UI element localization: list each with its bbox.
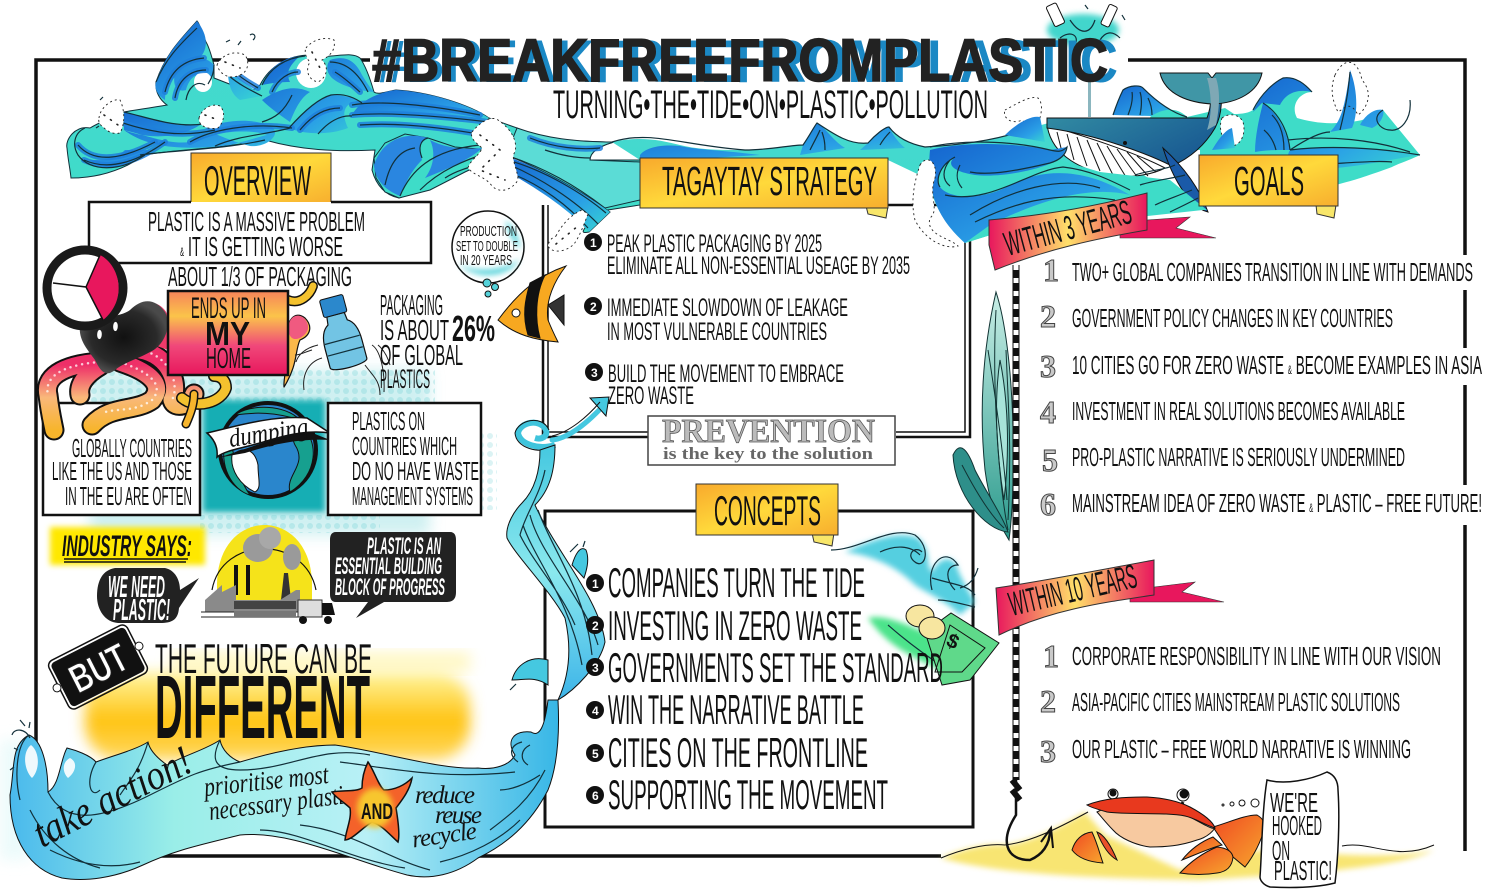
text: ESSENTIAL BUILDING [335,553,442,580]
cascade [505,156,610,232]
list: ten year goals [1040,638,1441,769]
top wave: left section [67,21,640,233]
plaque: prevention [648,413,895,465]
text: DIFFERENT [155,658,370,758]
icon: plastic bottle [313,292,368,372]
thought dots [1222,799,1259,807]
text: packaging is about 26% [380,290,495,394]
plaque: prevention: is the key to the solution [663,444,874,463]
thought bubble: production doubling: PRODUCTION [460,223,517,240]
heading: tagaytay strategy [640,158,888,218]
foam patches [99,38,588,251]
title: #BREAKFREEFROMPLASTIC [372,27,1108,94]
top wave: right section [1200,62,1420,200]
list: strategy items [584,230,910,410]
text: packaging is about 26%: PLASTICS [380,364,430,394]
speech bubble: we need plastic: PLASTIC! [113,592,170,627]
list: three year goals [1040,252,1482,522]
icon: tropical fish [498,266,566,342]
text: reduce reuse recycle [410,782,482,853]
heading: goals: GOALS [1234,158,1304,204]
ribbon: within 10 years [996,558,1224,635]
list: three year goals: 5 [1042,442,1058,478]
speech bubble: essential building block [330,532,456,618]
spray droplets [96,34,255,128]
list: strategy items: IN MOST VULNERABLE COUNTRIES [607,318,827,346]
list: strategy items: BUILD THE MOVEMENT TO EMBRACE [608,360,844,388]
halftone background behind globe [90,370,497,535]
list: concept items: 5 [592,747,599,761]
list: three year goals: 3 [1040,348,1056,384]
text: DO NO HAVE WASTE [352,456,479,486]
thought bubble: production doubling [452,211,524,297]
crest one [155,21,262,100]
big blue wave in front of whale [913,97,1244,247]
list: strategy items: 1 [590,236,597,250]
text: packaging is about 26%: 26% [452,308,495,349]
text: packaging is about 26%: IS ABOUT [380,315,449,347]
text: reduce reuse recycle: reuse [435,802,482,829]
speech bubble: essential building block: PLASTIC IS AN [367,533,441,560]
list: strategy items: 3 [591,366,598,380]
eye of crest two [296,58,326,88]
title: #BREAKFREEFROMPLASTIC [377,28,1118,95]
text: take action: take action! [26,738,200,857]
list: strategy items: PEAK PLASTIC PACKAGING BY 2025 [607,230,822,258]
box: ends up in my home: HOME [206,343,251,375]
icon: starfish: AND [361,799,393,824]
list: strategy items: 2 [590,300,597,314]
heading: industry says: INDUSTRY SAYS: [62,530,192,563]
list: concept items: COMPANIES TURN THE TIDE [608,559,865,606]
wave stripes [78,58,600,165]
speech bubble: hooked on plastic: PLASTIC! [1274,855,1332,886]
box: ends up in my home: ENDS UP IN [191,292,266,325]
list: strategy items: ELIMINATE ALL NON-ESSENTIAL USEAGE BY 2035 [607,252,910,280]
left curl and band [90,112,275,167]
plaque: prevention: PREVENTION [662,413,875,450]
speech bubble: hooked on plastic [1260,772,1339,888]
heading: tagaytay strategy: TAGAYTAY STRATEGY [662,158,877,204]
heading: concepts: CONCEPTS [714,487,821,534]
ribbon: within 3 years [989,193,1216,270]
heading: overview: OVERVIEW [204,157,311,204]
text: THE FUTURE CAN BE [155,635,372,682]
list: concept items [586,559,943,818]
wave crests behind whale [1113,86,1240,150]
thought bubble: production doubling: IN 20 YEARS [460,252,512,269]
list: concept items: 1 [592,577,599,591]
list: three year goals: 1 [1043,252,1059,288]
speech bubble: hooked on plastic: ON [1272,835,1290,866]
sand [941,812,1434,880]
heading: industry says [50,527,205,565]
text: GLOBALLY COUNTRIES [72,433,192,463]
list: ten year goals: 1 [1043,638,1059,674]
octopus [47,286,313,430]
panel: concepts box [545,511,973,827]
panel: tagaytay strategy box [543,205,970,437]
icon: factory [201,525,335,624]
wave: bottom take action [0,700,559,879]
text: LIKE THE US AND THOSE [52,456,192,486]
seaweed [953,292,1013,540]
top wave: middle section [612,120,1203,243]
list: three year goals: 4 [1040,394,1056,430]
speech bubble: we need plastic: WE NEED [108,569,165,604]
speech bubble: we need plastic [97,568,199,627]
plaque: but [41,620,155,714]
rope with hook [1007,265,1053,860]
text: prioritise [201,759,355,826]
crest two [262,56,374,133]
eye of crest one [194,72,212,92]
teal tip area [506,128,640,208]
box: ends up in my home [168,291,288,375]
text: reduce reuse recycle: recycle [410,818,479,853]
thought bubble: production doubling: SET TO DOUBLE [456,238,518,255]
panel: overview statement: & IT IS GETTING WORSE [180,231,343,262]
list: strategy items: ZERO WASTE [608,382,694,410]
panel: plastics on countries [328,403,481,515]
wave line work [75,28,606,228]
text: BLOCK OF PROGRESS [335,574,445,601]
text: GOVERNMENTS SET THE STANDARD [608,644,943,691]
panel: plastics on countries: PLASTICS ON [352,406,425,436]
ribbon: within 10 years: WITHIN 10 YEARS [1005,558,1140,624]
panel: overview statement [89,202,431,263]
base water band [67,21,640,233]
small wave and money: $ [943,630,962,654]
heading: overview [191,153,331,214]
list: strategy items: IMMEDIATE SLOWDOWN OF LEAKAGE [607,294,848,322]
list: three year goals: 6 [1040,486,1056,522]
text: packaging is about 26%: PACKAGING [380,290,443,322]
list: concept items: CITIES ON THE FRONTLINE [608,729,868,776]
box: ends up in my home: MY [205,315,250,352]
speech bubble: hooked on plastic: WE'RE [1270,787,1318,818]
speech bubble: hooked on plastic: HOOKED [1272,810,1322,841]
whale [1047,73,1262,212]
list: concept items: 6 [592,789,599,803]
text: prioritise: necessary plastic [207,779,355,826]
text: MANAGEMENT SYSTEMS [352,481,473,511]
list: three year goals: 2 [1040,298,1056,334]
central water band blue [352,90,489,122]
text: about one third of packaging: ABOUT 1/3 OF PACKAGING [168,261,352,292]
text: IN THE EU ARE OFTEN [65,481,192,511]
text: packaging is about 26%: OF GLOBAL [380,340,463,372]
heading: goals [1199,155,1338,218]
list: concept items: INVESTING IN ZERO WASTE [608,602,862,649]
pie chart: one third [47,250,123,326]
list: ten year goals: 2 [1040,683,1056,719]
text: the future can be different [155,635,372,758]
list: concept items: 4 [592,704,599,718]
crab [1072,789,1265,874]
small wave and money [831,533,999,685]
plaque: but: BUT [62,636,136,702]
icon: starfish [332,762,412,842]
text: reduce reuse recycle: reduce [415,782,475,809]
text: TURNING•THE•TIDE•ON•PLASTIC•POLLUTION [553,83,988,127]
yellow highlight behind different [85,652,470,760]
icon: globe with dumping arrow: dumping [227,412,310,453]
vertical wave with arrow [507,397,609,700]
list: concept items: 2 [592,619,599,633]
panel: plastics on countries: COUNTRIES WHICH [352,431,457,461]
heading: concepts [696,484,838,546]
list: concept items: SUPPORTING THE MOVEMENT [608,771,888,818]
icon: globe with dumping arrow [207,403,330,497]
plastic spray above whale [1046,2,1125,46]
text: prioritise: prioritise most [201,759,331,802]
wave drape above overview box [374,134,495,198]
ribbon: within 3 years: WITHIN 3 YEARS [1000,193,1136,264]
list: concept items: WIN THE NARRATIVE BATTLE [608,686,864,733]
panel: globally countries [43,403,200,515]
panel: overview statement: PLASTIC IS A MASSIVE PROBLEM [148,206,365,237]
list: concept items: 3 [592,661,599,675]
list: ten year goals: 3 [1040,733,1056,769]
spray lines from bottle [295,345,390,395]
